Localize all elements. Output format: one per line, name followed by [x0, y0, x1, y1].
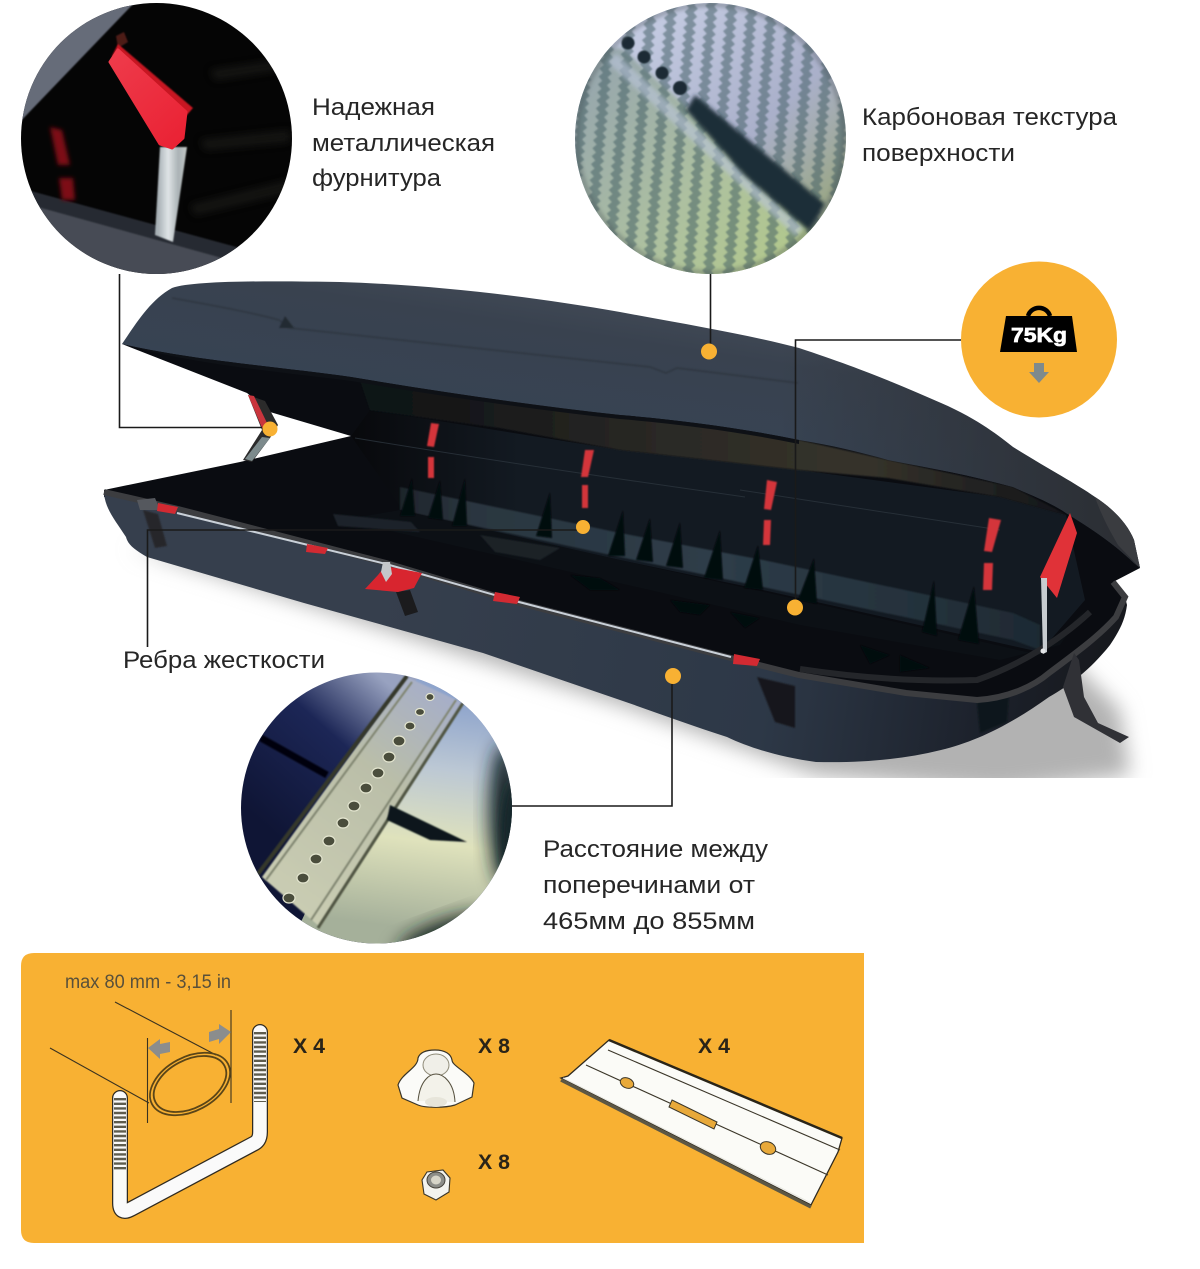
- label: metal fittings: фурнитура: [312, 165, 442, 192]
- interior ribs: [400, 478, 979, 672]
- label: carbon texture: Карбоновая текстура: [862, 104, 1118, 131]
- label: metal fittings: металлическая: [312, 130, 495, 157]
- label: stiffening ribs: Ребра жесткости: [123, 647, 325, 674]
- circle photo: metal latch: [21, 3, 292, 274]
- red lid stripes: [427, 423, 1001, 590]
- rear handle: [1063, 653, 1129, 743]
- callout lines: [120, 274, 961, 806]
- icon: U-bolt: [120, 1032, 260, 1211]
- icon: weight: 75Kg: [1011, 325, 1067, 347]
- load badge: 75Kg: [961, 262, 1117, 418]
- quantity: nuts: X 8: [478, 1151, 510, 1174]
- label: crossbar distance: [543, 836, 768, 935]
- right latch: [1040, 513, 1077, 654]
- label: carbon texture: поверхности: [862, 140, 1015, 167]
- label: crossbar distance: Расстояние между: [543, 836, 768, 863]
- lid: [122, 281, 1140, 568]
- lid left latch: [243, 395, 278, 462]
- quantity: U-bolts: X 4: [293, 1035, 325, 1058]
- icon: weight: [1000, 308, 1077, 352]
- circle photo: carbon texture: [574, 2, 848, 280]
- panel: mounting kit: [21, 953, 864, 1243]
- box interior: [104, 344, 1140, 700]
- box shadow on ground: [130, 548, 1130, 792]
- callout dots: [262, 344, 803, 684]
- icon: mounting plate: [561, 1040, 842, 1207]
- quantity: knobs: X 8: [478, 1035, 510, 1058]
- icon: down arrow: [1029, 363, 1049, 383]
- label: carbon texture: [862, 104, 1118, 167]
- label: crossbar distance: 465мм до 855мм: [543, 908, 755, 935]
- icon: width arrows: [148, 1024, 231, 1059]
- icon: crossbar tube: [50, 1002, 241, 1128]
- circle photo: mounting rail: [241, 672, 512, 944]
- front latch: [365, 562, 422, 616]
- photo: open roof box: [104, 281, 1140, 762]
- quantity: plates: X 4: [698, 1035, 730, 1058]
- label: metal fittings: [312, 94, 495, 192]
- rim clips: [157, 503, 760, 666]
- label: crossbar distance: поперечинами от: [543, 872, 755, 899]
- box base: [104, 492, 1127, 762]
- icon: knob: [398, 1050, 474, 1107]
- dimension text: max 80 mm - 3,15 in: [65, 972, 231, 993]
- icon: nut: [422, 1170, 450, 1200]
- label: metal fittings: Надежная: [312, 94, 435, 121]
